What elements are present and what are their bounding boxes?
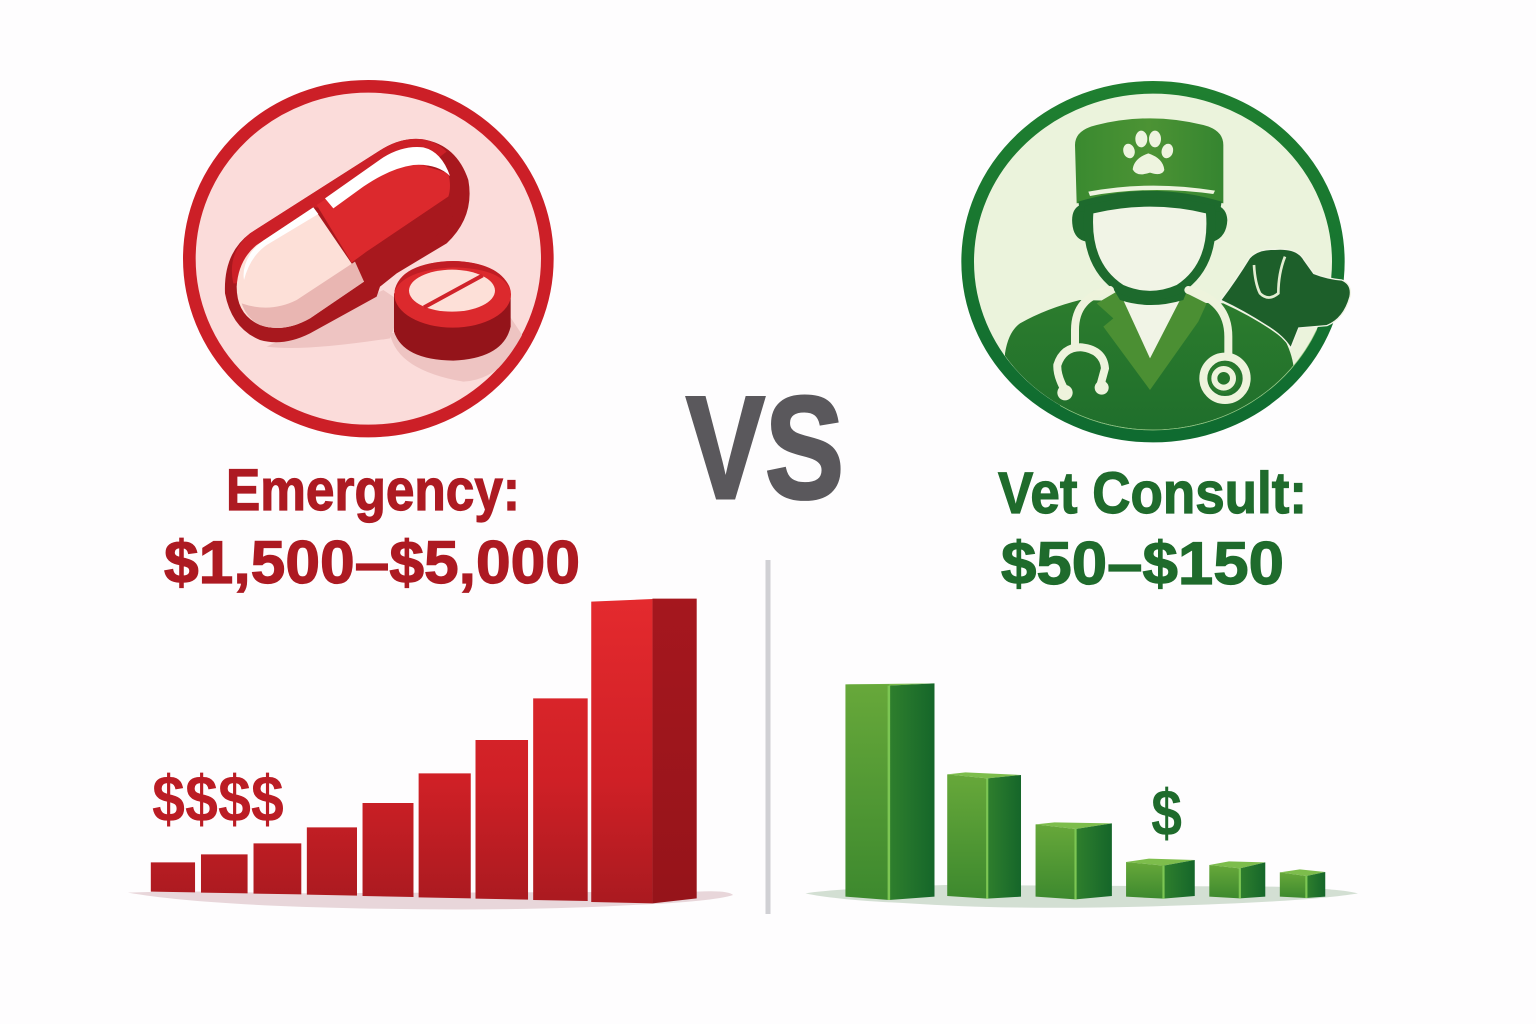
- cap: [1075, 118, 1223, 212]
- tablet: [394, 261, 511, 361]
- capsule body: [225, 139, 470, 342]
- heading: emergency cost: $1,500–$5,000: [164, 529, 580, 596]
- center divider: [766, 560, 770, 914]
- chart: falling green bars: [805, 683, 1358, 908]
- heading: emergency cost: Emergency:: [226, 458, 520, 523]
- green bar 6: [1280, 869, 1325, 898]
- dollar sign: $: [1151, 775, 1182, 850]
- dollar signs: $$$$: [152, 762, 284, 836]
- heading: emergency cost: [164, 458, 580, 596]
- coat lapels: [1097, 292, 1207, 390]
- ground shadow: [128, 891, 733, 909]
- icon: red pill badge: [189, 86, 547, 431]
- capsule red half: [317, 161, 450, 263]
- pill shadows: [267, 290, 523, 382]
- red bars: [151, 599, 652, 903]
- green bar 2: [947, 772, 1021, 899]
- green bar 5: [1209, 861, 1265, 898]
- tall bar side: [652, 599, 697, 903]
- paw print: [1122, 131, 1175, 174]
- VS heading: VS: [686, 366, 844, 529]
- dog: [1222, 250, 1350, 347]
- heading: vet consult cost: Vet Consult:: [998, 461, 1307, 526]
- heading: vet consult cost: [998, 461, 1307, 597]
- green bar 3: [1036, 822, 1112, 899]
- inner rim line: [974, 93, 1332, 430]
- heading: vet consult cost: $50–$150: [1001, 530, 1284, 597]
- icon: vet with dog badge: [968, 87, 1350, 443]
- capsule white half: [237, 207, 364, 328]
- green bar 1: [845, 683, 934, 900]
- chart: rising red bars: [128, 599, 733, 909]
- ground shadow: [805, 885, 1358, 908]
- green bar 4: [1126, 859, 1195, 899]
- face: [1093, 207, 1206, 291]
- badge circle: [189, 86, 547, 431]
- ears and hair: [1072, 205, 1227, 242]
- stethoscope: [1057, 290, 1247, 400]
- vet body: [1005, 292, 1294, 443]
- neck: [1110, 283, 1190, 305]
- badge circle: [968, 87, 1338, 436]
